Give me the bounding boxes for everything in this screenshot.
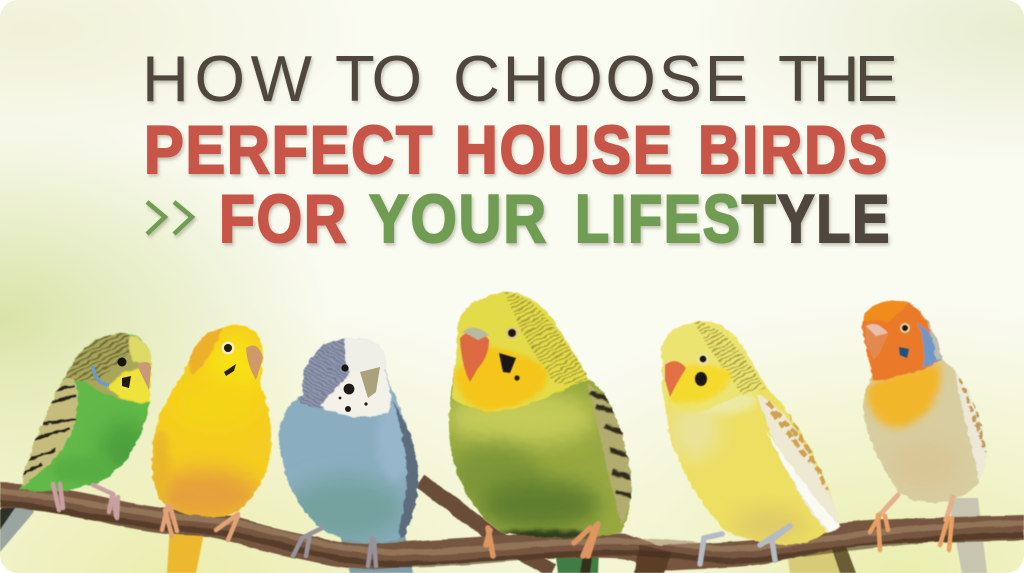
bird 2: yellow budgerigar <box>150 324 273 518</box>
head 1 <box>60 331 152 402</box>
bird 6: orange-faced parakeet <box>860 300 988 504</box>
face 2 <box>222 342 263 380</box>
back branch <box>420 481 552 571</box>
wing 1 <box>18 376 78 488</box>
bird 1: green budgerigar <box>15 330 155 495</box>
title line 2: PERFECT <box>144 112 434 188</box>
title line 1 <box>147 55 898 106</box>
head 4 <box>453 291 590 412</box>
title line 1: HOW <box>142 42 313 115</box>
title line 2: BIRDS <box>698 112 889 188</box>
title line 2: HOUSE <box>455 112 674 188</box>
face 4 <box>460 327 520 382</box>
title line 3: LIFESTYLE <box>575 181 891 257</box>
icon: double chevron <box>147 202 192 234</box>
face 6 <box>865 323 910 360</box>
wing 6 <box>955 372 988 490</box>
head 3 <box>298 335 390 417</box>
wing 5 <box>757 394 845 535</box>
title line 3: YOUR <box>369 181 548 257</box>
title line 1: THE <box>778 42 898 115</box>
title line 3: FOR <box>219 181 348 257</box>
face 3 <box>339 364 380 412</box>
bird 4: olive green budgerigar <box>445 290 640 540</box>
face 1 <box>93 358 151 390</box>
bird feet <box>53 484 953 566</box>
bird 3: blue budgerigar <box>278 338 420 544</box>
wing 4 <box>587 384 636 525</box>
bird tails behind the branch <box>0 498 988 573</box>
title line 1: TO <box>335 42 422 115</box>
title line 1: CHOOSE <box>453 42 748 115</box>
head 2 <box>188 328 222 375</box>
bird 5: pale yellow budgerigar <box>660 320 841 546</box>
title <box>146 55 898 248</box>
head 6 <box>858 299 944 380</box>
chest 6 <box>866 362 941 428</box>
title line 2 <box>147 124 889 178</box>
main branch <box>0 491 1024 573</box>
title line 3 <box>222 194 892 248</box>
wing 3 <box>392 400 420 542</box>
face 5 <box>665 354 708 397</box>
head 5 <box>658 320 765 413</box>
